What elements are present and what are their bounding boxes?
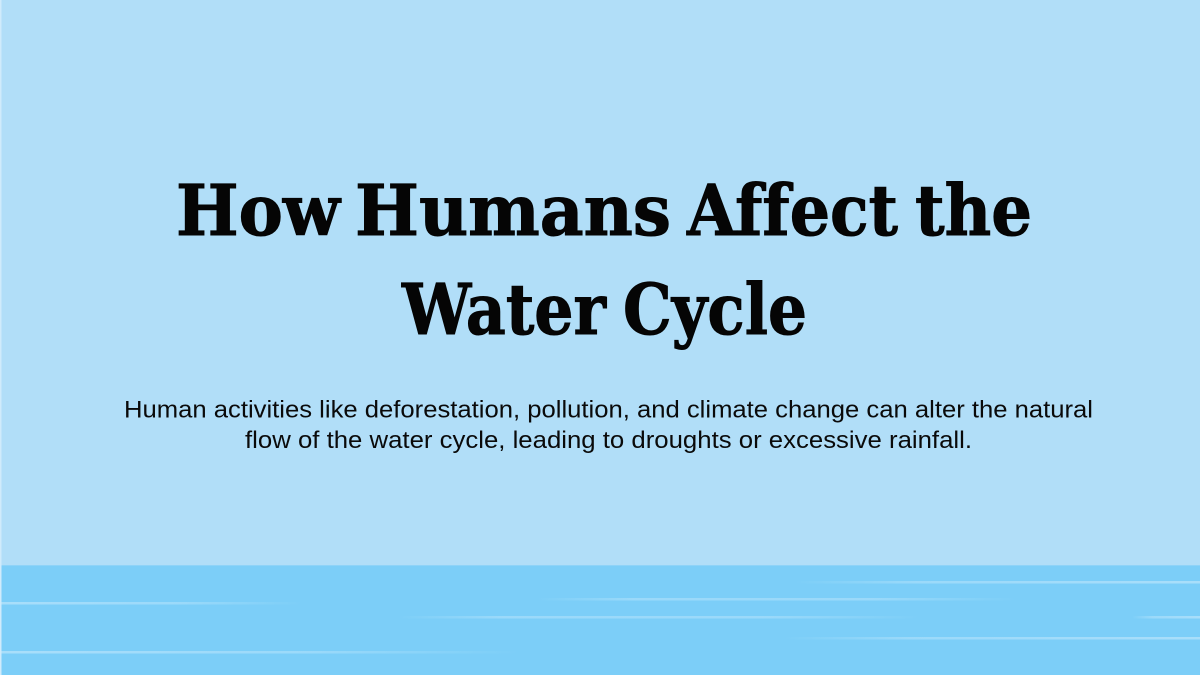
title: Water xyxy=(401,268,607,351)
left edge strip xyxy=(0,0,2,675)
subtitle text block: Human activities like deforestation, pollution, and climate change can alter the natural xyxy=(124,396,1093,424)
title: Affect xyxy=(686,169,898,252)
subtitle text block xyxy=(124,396,1093,454)
title: How xyxy=(176,169,342,252)
subtitle text block: flow of the water cycle, leading to droughts or excessive rainfall. xyxy=(245,427,972,454)
water band with ripples xyxy=(0,565,1200,675)
title: Cycle xyxy=(623,268,807,351)
title: the xyxy=(915,169,1032,252)
title xyxy=(176,169,1032,351)
title: Humans xyxy=(355,169,671,252)
